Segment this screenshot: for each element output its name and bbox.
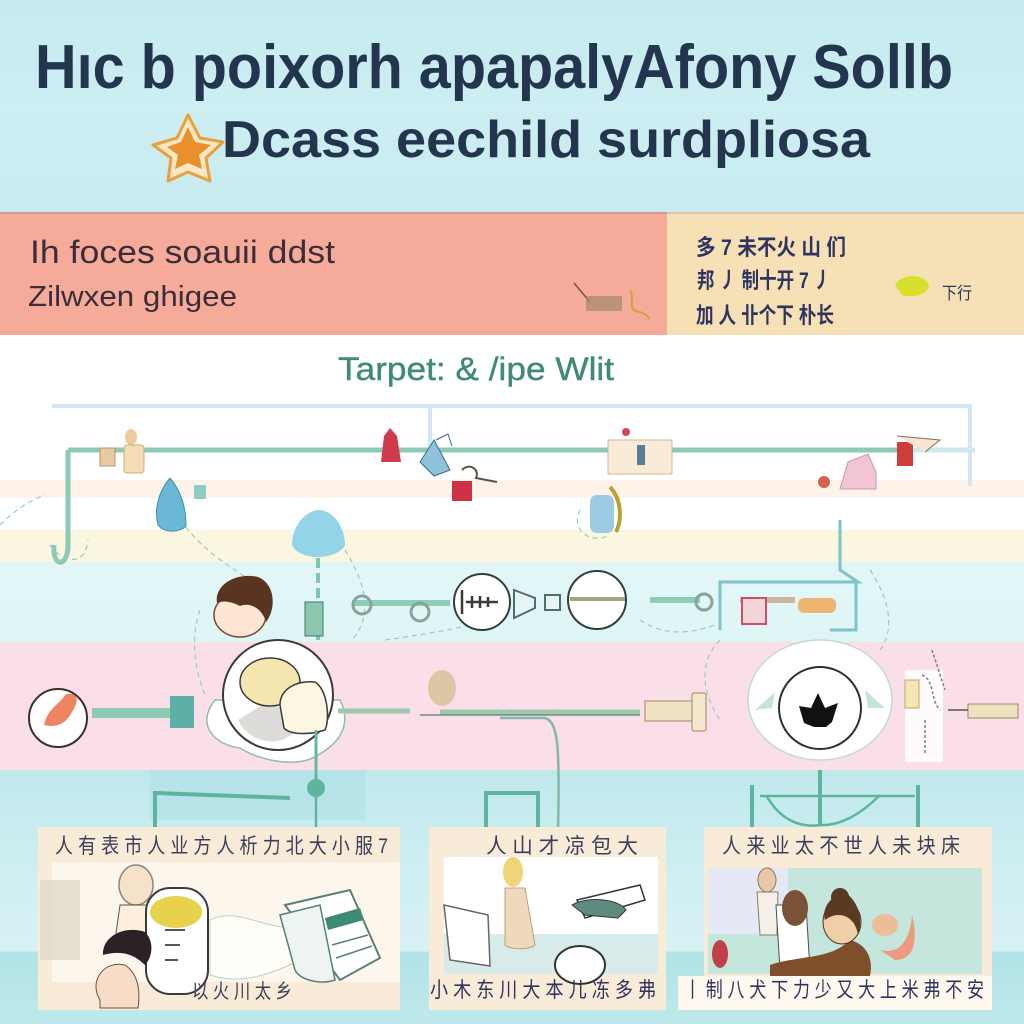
icon: red ear — [712, 940, 728, 968]
sketch marks around the flow — [0, 495, 889, 720]
centre card caption: 小 木 东 川 大 本 儿 冻 多 弗 — [430, 979, 656, 1002]
icon: person back — [503, 857, 535, 949]
icon: blue dome — [292, 510, 345, 640]
panel: cream side note — [667, 212, 1024, 335]
title banner background — [0, 0, 1024, 212]
centre card heading: 人 山 才 凉 包 大 — [486, 835, 638, 858]
left card caption: 以 火 川 太 乡 — [192, 980, 292, 1003]
side note line 2: 邦 丿 制十开 7 丿 — [697, 268, 831, 293]
icon: large star circle — [748, 640, 892, 760]
right card heading: 人 来 业 太 不 世 人 未 块 床 — [722, 835, 960, 858]
icon: open book — [280, 890, 380, 982]
side note line 3: 加 人 卝个下 朴长 — [696, 303, 834, 328]
icon: virus circle — [29, 689, 87, 747]
icon: cards centre — [590, 428, 672, 533]
title line 2: Dcass eechild surdpliosa — [222, 111, 871, 169]
flow pipe: top green rail — [54, 450, 975, 562]
flow pipe: pink band centre — [316, 711, 640, 830]
icon: yellow blob with label: 下行 — [942, 284, 972, 303]
flow pipe: pink band left — [92, 696, 194, 728]
icon: circle with rod — [568, 571, 626, 629]
icon: red figure — [381, 428, 452, 476]
icon: woman with brown hair — [776, 890, 810, 970]
icon: pillow stack — [444, 905, 490, 966]
icon: cable plug left — [645, 693, 706, 731]
icon: tan figure top left — [100, 429, 144, 473]
left card heading: 人 有 表 市 人 业 方 人 析 力 北 大 小 服 7 — [55, 835, 388, 858]
icon: plate with egg and jar — [207, 640, 345, 762]
panel: salmon intro — [0, 212, 667, 335]
icon: red box — [452, 467, 497, 501]
icon: yellow blob with label — [895, 276, 972, 303]
icon: small scribble panel right — [905, 650, 945, 762]
icon: sketch right vertical — [720, 520, 858, 630]
icon: mother and child — [770, 888, 871, 982]
flow pipe: middle band — [305, 594, 795, 636]
flow frame: top blue rail — [52, 406, 970, 486]
background stripes — [0, 335, 1024, 1024]
intro subheading: Zilwxen ghigee — [28, 281, 237, 313]
section heading: Tarpet: & /ipe Wlit — [338, 351, 614, 387]
icon: doctor — [757, 868, 778, 935]
title — [35, 33, 953, 169]
panel: centre card — [429, 827, 666, 1010]
panel: left card — [38, 827, 400, 1010]
icon: child head — [214, 576, 273, 637]
icon: tan blob — [428, 670, 456, 706]
side note line 1: 多 7 未不火 山 们 — [696, 235, 846, 260]
icon: adult figure — [115, 865, 153, 950]
intro heading: Ih foces soauii ddst — [30, 234, 335, 270]
icon: child — [96, 930, 151, 1008]
panel: right card — [704, 827, 992, 1010]
panel: right card caption strip — [678, 976, 992, 1010]
icon: small scribble — [574, 283, 649, 319]
icon: circle with screw — [454, 574, 510, 630]
connectors to panels — [155, 770, 918, 828]
icon: blue bottle left — [156, 478, 206, 531]
icon: jar with lemon — [146, 888, 208, 994]
title line 1: Hıc b poixorh apapalyAfony Sollb — [35, 33, 953, 102]
icon: green bag — [572, 885, 645, 918]
icon: pillow — [210, 916, 300, 979]
icon: star — [153, 115, 223, 181]
icon: connector between circles — [514, 590, 560, 618]
icon: round dish — [555, 946, 605, 984]
icon: pink pile top right — [818, 436, 940, 489]
icon: red and orange parts — [742, 598, 836, 624]
icon: cable plug right — [948, 704, 1018, 718]
icon: salmon shapes — [872, 914, 915, 960]
